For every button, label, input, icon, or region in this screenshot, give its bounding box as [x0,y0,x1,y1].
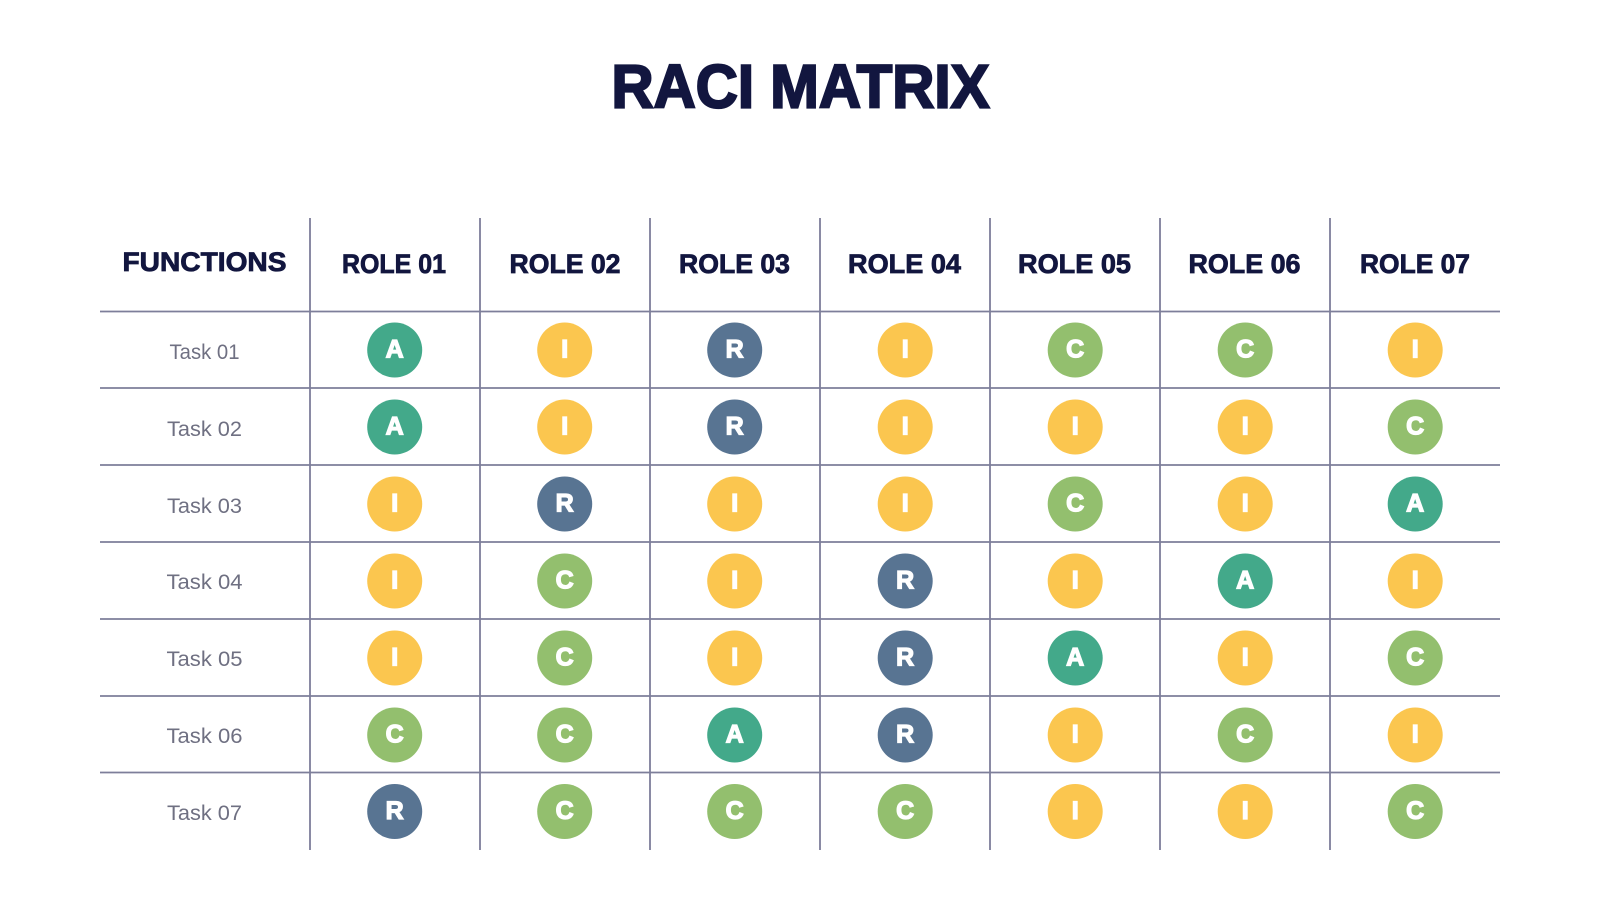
label: task 05: Task 05 [166,648,242,671]
badge: C [1388,400,1443,454]
badge: I: I [561,412,568,440]
badge: C: C [386,720,404,748]
badge: R [367,784,422,839]
badge: I: I [1242,490,1249,518]
badge: C [537,554,592,608]
badge: I [1048,554,1103,608]
badge: I: I [1242,644,1249,672]
badge: I [367,476,422,532]
badge: C [878,784,933,839]
badge: R [878,708,933,762]
badge: A [1048,630,1103,686]
badge: I [1048,784,1103,839]
badge: C: C [1406,797,1424,825]
label: task 02: Task 02 [167,418,242,441]
header: role 07: ROLE 07 [1360,249,1470,279]
row: task 03 [167,476,1443,532]
badge: A: A [1066,644,1084,672]
row: task 04 [166,554,1443,608]
badge: I: I [731,490,738,518]
badge: I [537,400,592,454]
label: task 04: Task 04 [166,571,243,594]
badge: R: R [386,797,404,825]
badge: I: I [1072,412,1079,440]
badge: C [1218,322,1273,378]
row: task 07 [167,784,1443,839]
badge: I [878,476,933,532]
badge: C: C [1406,412,1424,440]
badge: A [367,322,422,378]
badge: C: C [556,797,574,825]
badge: R: R [726,412,744,440]
header: role 04: ROLE 04 [848,249,961,279]
badge: R: R [896,644,914,672]
label: task 01: Task 01 [170,341,240,364]
badge: I [1388,554,1443,608]
row: task 05 [166,630,1443,686]
badge: C [1048,476,1103,532]
badge: I: I [902,336,909,364]
badge: I [878,322,933,378]
badge: C: C [556,566,574,594]
badge: A: A [386,336,404,364]
row: task 02 [167,400,1443,454]
badge: A: A [1406,490,1424,518]
badge: I: I [902,412,909,440]
badge: I [707,554,762,608]
badge: I: I [1242,797,1249,825]
table header row [122,247,1470,279]
badge: I [537,322,592,378]
badge: I [878,400,933,454]
badge: A: A [386,412,404,440]
badge: C [367,708,422,762]
badge: C [537,630,592,686]
badge: R [878,554,933,608]
row: task 06 [166,708,1443,762]
badge: C [1388,784,1443,839]
badge: C: C [556,644,574,672]
badge: A [367,400,422,454]
header: role 06: ROLE 06 [1188,249,1300,279]
badge: C [1218,708,1273,762]
row: task 01 [170,322,1443,378]
badge: I [1388,708,1443,762]
badge: R [707,322,762,378]
badge: I: I [731,644,738,672]
badge: A: A [726,720,744,748]
badge: I: I [1412,336,1419,364]
label: task 06: Task 06 [166,725,242,748]
badge: A [1218,554,1273,608]
badge: I: I [902,490,909,518]
badge: I: I [1072,797,1079,825]
badge: C [707,784,762,839]
badge: I: I [561,336,568,364]
badge: C: C [556,720,574,748]
badge: I [1218,784,1273,839]
badge: A [1388,476,1443,532]
badge: R [707,400,762,454]
badge: C: C [1406,644,1424,672]
badge: C [537,784,592,839]
badge: I: I [1072,566,1079,594]
badge: I: I [1412,566,1419,594]
badge: I [707,476,762,532]
badge: C: C [1066,490,1084,518]
header: role 02: ROLE 02 [510,249,620,279]
badge: I [1388,322,1443,378]
badge: R: R [556,490,574,518]
badge: I [1218,630,1273,686]
badge: A [707,708,762,762]
badge: C [537,708,592,762]
badge: C [1388,630,1443,686]
badge: I [367,554,422,608]
badge: R: R [896,720,914,748]
label: task 07: Task 07 [167,802,242,825]
badge: R: R [726,336,744,364]
badge: C: C [726,797,744,825]
badge: I: I [391,644,398,672]
badge: I: I [391,566,398,594]
badge: A: A [1236,566,1254,594]
badge: R [537,476,592,532]
header: role 05: ROLE 05 [1018,249,1131,279]
badge: C: C [1066,336,1084,364]
badge: C: C [1236,720,1254,748]
badge: R [878,630,933,686]
badge: I [1218,400,1273,454]
badge: I [367,630,422,686]
badge: I: I [1072,720,1079,748]
header: functions: FUNCTIONS [122,247,286,277]
header: role 03: ROLE 03 [679,249,790,279]
badge: I [1048,708,1103,762]
badge: I [1218,476,1273,532]
badge: I: I [391,490,398,518]
badge: R: R [896,566,914,594]
badge: C: C [1236,336,1254,364]
title: RACI MATRIX [612,52,990,120]
badge: I: I [1412,720,1419,748]
badge: I [1048,400,1103,454]
badge: I: I [1242,412,1249,440]
badge: C [1048,322,1103,378]
header: role 01: ROLE 01 [342,249,446,279]
badge: I [707,630,762,686]
badge: C: C [896,797,914,825]
label: task 03: Task 03 [167,495,242,518]
badge: I: I [731,566,738,594]
